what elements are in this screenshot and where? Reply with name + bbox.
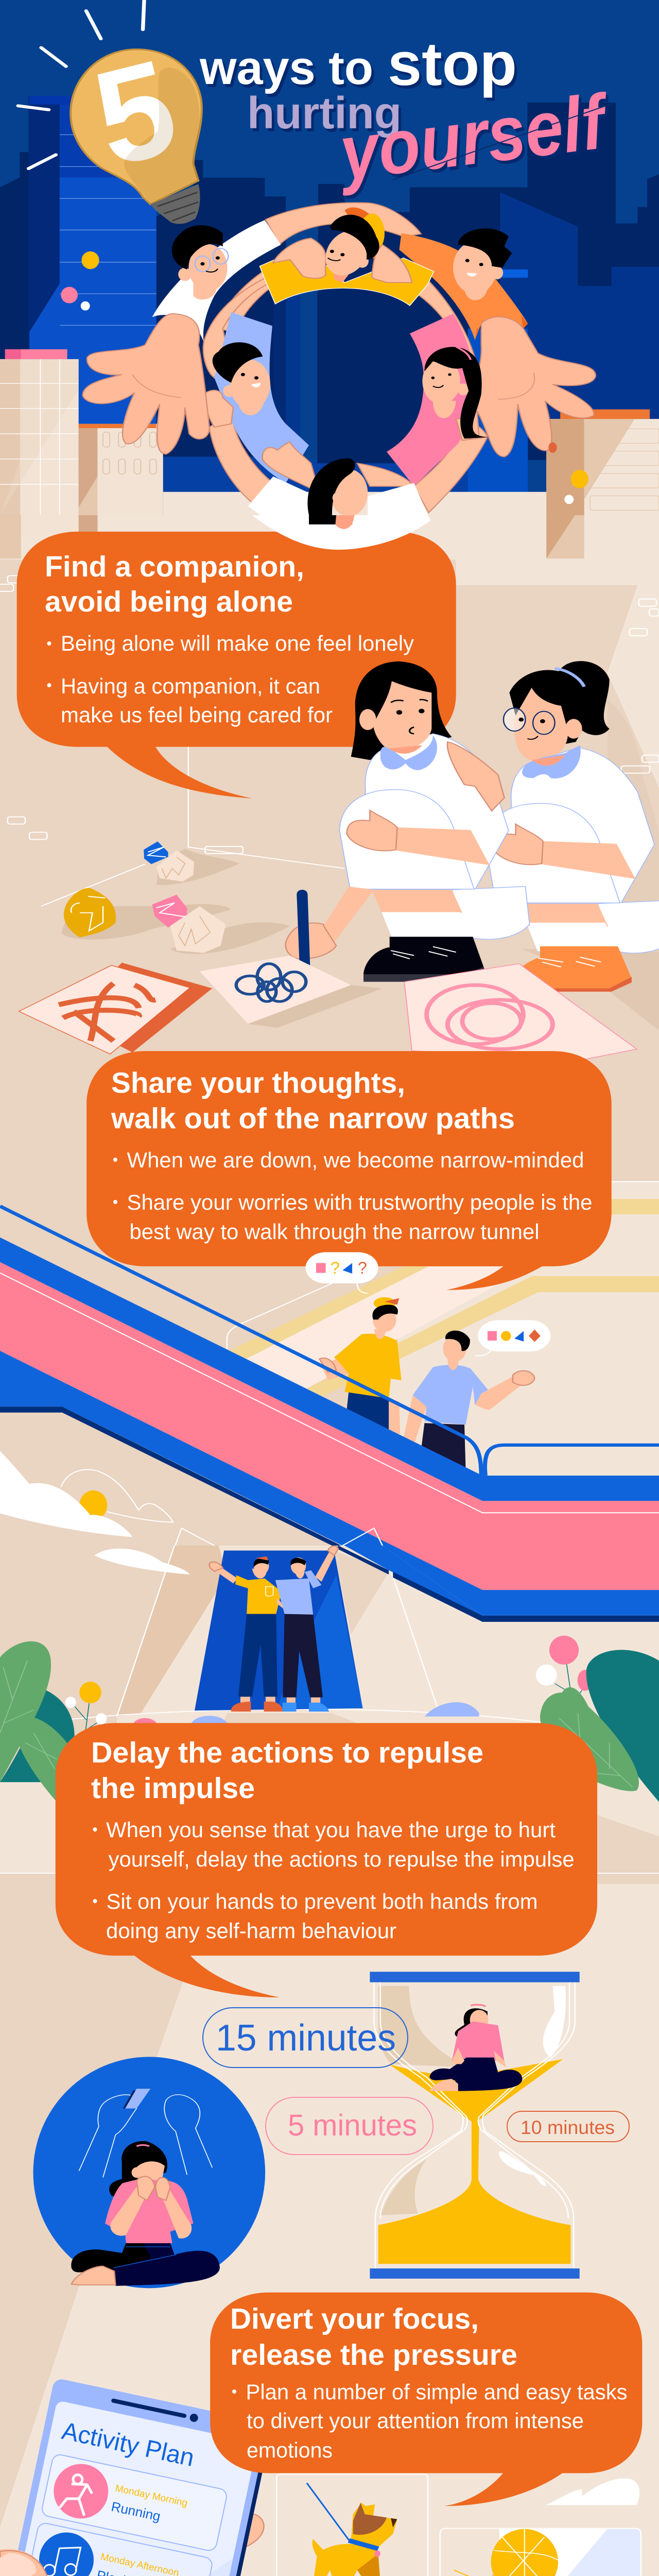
hand holding phone <box>0 2549 252 2576</box>
label: 10 minutes <box>507 2111 629 2142</box>
foreground buildings <box>0 349 659 515</box>
title: ways to <box>199 42 373 94</box>
escalator end <box>336 1546 659 1622</box>
panel: delay the actions: yourself, delay the actions to repulse the impulse <box>109 1847 575 1871</box>
panel: find a companion: Find a companion, <box>45 550 304 583</box>
title <box>199 30 615 197</box>
panel: find a companion <box>17 532 456 799</box>
right plants <box>536 1636 659 1802</box>
title: yourself <box>332 77 615 197</box>
cloud and sun <box>0 1451 383 1546</box>
card: music <box>26 2522 214 2576</box>
ground humps <box>132 1702 479 1737</box>
panel: delay the actions: Delay the actions to repulse <box>91 1736 483 1769</box>
panel: divert your focus: to divert your attention from intense <box>247 2409 584 2433</box>
card: running: Monday Morning <box>114 2483 188 2509</box>
label: 15 minutes: 15 minutes <box>216 2018 396 2059</box>
big right hand <box>462 317 596 456</box>
panel: find a companion: avoid being alone <box>45 585 293 618</box>
title: stop <box>388 30 517 98</box>
hand base and finger behind phone <box>223 2514 274 2576</box>
drawing sheets <box>19 956 637 1059</box>
ring of arms and friends <box>83 202 596 517</box>
dog on a leash <box>276 2474 639 2576</box>
illustration: distressed girl in blue circle <box>33 2057 265 2288</box>
big left hand <box>83 314 210 454</box>
girl on hourglass <box>429 2005 523 2091</box>
panel: divert your focus: release the pressure <box>230 2338 517 2371</box>
panel: divert your focus: Divert your focus, <box>230 2302 479 2335</box>
phone: activity plan <box>0 2378 273 2576</box>
panel: delay the actions <box>56 1723 597 1997</box>
label: 5 minutes: 5 minutes <box>288 2109 417 2142</box>
girl with short hair <box>340 662 530 982</box>
blue stage <box>195 1551 362 1710</box>
title: hurting <box>247 88 402 138</box>
illustration: two girls drawing <box>19 515 659 1059</box>
panel: share your thoughts <box>86 1051 612 1290</box>
card: running: Running <box>110 2499 162 2524</box>
panel: share your thoughts: best way to walk through the narrow tunnel <box>130 1219 540 1244</box>
label: 15 minutes <box>203 2008 408 2067</box>
panel: delay the actions: Sit on your hands to prevent both hands from <box>106 1889 537 1913</box>
outlined hands and blade <box>79 2089 212 2177</box>
arrival scene: two friends on stage <box>0 1546 659 1802</box>
girl with ponytail <box>485 661 659 992</box>
panel: share your thoughts: Share your thoughts, <box>111 1066 405 1099</box>
panel: divert your focus: Plan a number of simple and easy tasks <box>246 2380 627 2404</box>
man in blue shirt <box>404 1331 534 1469</box>
panel: delay the actions: When you sense that you have the urge to hurt <box>106 1818 556 1842</box>
basketball and hoop <box>440 2529 641 2576</box>
small hands <box>273 238 326 278</box>
panel: divert your focus <box>210 2293 642 2506</box>
speaker and camera <box>113 2397 199 2422</box>
bottom friend overlap <box>252 515 431 550</box>
panel: share your thoughts: Share your worries with trustworthy people is the <box>127 1190 592 1214</box>
panel: find a companion: Having a companion, it can <box>61 674 320 698</box>
panel: find a companion: Being alone will make one feel lonely <box>61 631 414 655</box>
panel: share your thoughts: walk out of the narrow paths <box>111 1102 515 1135</box>
bottom friend <box>248 477 428 515</box>
panel: find a companion: make us feel being cared for <box>61 703 333 727</box>
panel: divert your focus: emotions <box>247 2438 333 2462</box>
speech bubble: confused: ? <box>331 1259 340 1277</box>
app title: Activity Plan <box>59 2417 197 2472</box>
decorative dots <box>61 251 99 311</box>
speech bubble: confused: ? <box>358 1259 367 1277</box>
speech bubble: clear <box>475 1320 550 1356</box>
man in yellow shirt <box>319 1297 402 1434</box>
section backgrounds <box>0 515 659 2576</box>
panel: delay the actions: doing any self-harm behaviour <box>106 1919 396 1943</box>
light bulb with number: 5 <box>81 30 190 195</box>
blue shirt man <box>275 1546 338 1711</box>
panel: delay the actions: the impulse <box>91 1772 255 1805</box>
light bulb with number <box>18 1 202 224</box>
panel: share your thoughts: When we are down, we become narrow-minded <box>127 1148 584 1172</box>
escalator scene <box>0 1206 659 1546</box>
left plants <box>0 1641 107 1802</box>
hero illustration: city and five friends <box>0 0 659 517</box>
hourglass with sitting girl <box>370 1972 580 2279</box>
hand with pencil <box>286 887 374 977</box>
crumpled paper balls <box>61 841 290 954</box>
label: 10 minutes: 10 minutes <box>521 2116 615 2138</box>
card: running <box>41 2453 228 2552</box>
escalator bands <box>0 1206 659 1546</box>
skyline <box>0 96 659 499</box>
yellow shirt man <box>210 1556 285 1711</box>
label: 5 minutes <box>266 2097 433 2155</box>
friend heads <box>194 279 216 299</box>
speech bubble: confused <box>305 1252 378 1293</box>
